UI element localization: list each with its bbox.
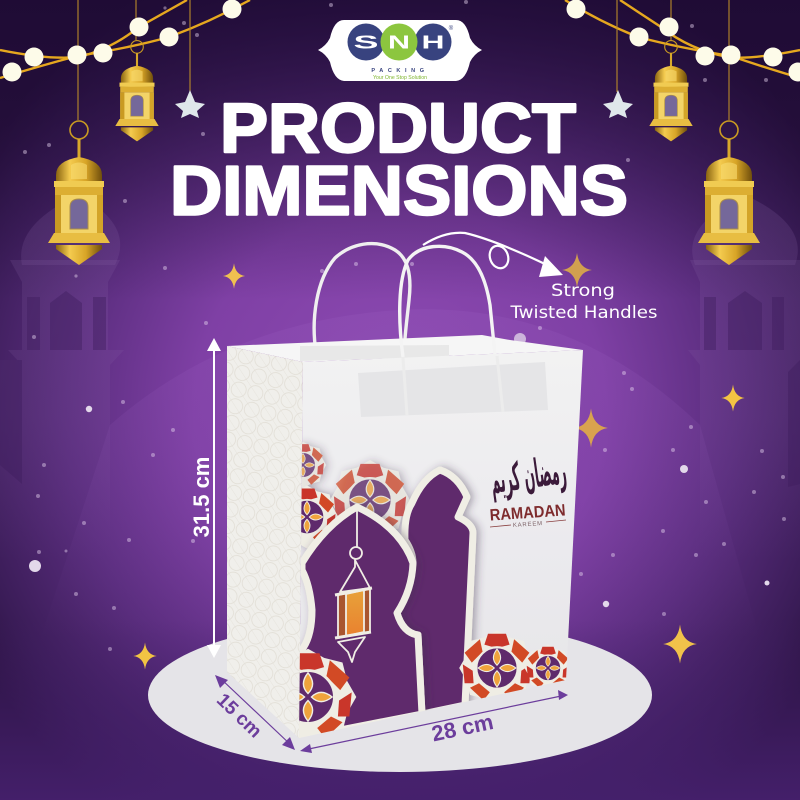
- logo: Your One Stop Solution: [373, 75, 427, 81]
- left mosque silhouette: [0, 195, 124, 560]
- kareem label: [490, 520, 566, 529]
- paper bag: [227, 244, 583, 745]
- dimension: width: 28 cm: [429, 709, 496, 746]
- logo: H: [422, 32, 444, 52]
- inner back shadow: [300, 345, 449, 361]
- front handle: [400, 246, 495, 357]
- back panel: [227, 335, 583, 362]
- title: DIMENSIONS: [170, 152, 628, 230]
- handwritten callout text: Twisted Handles: [509, 303, 658, 323]
- side panel: [227, 346, 303, 738]
- handwritten callout text: Strong: [551, 281, 615, 301]
- bottom rosettes: [299, 648, 356, 734]
- handwritten callout text: [509, 281, 658, 323]
- right garland: [565, 0, 800, 120]
- logo: ®: [449, 25, 454, 32]
- ramadan label: RAMADAN: [489, 501, 566, 525]
- logo: [318, 20, 482, 81]
- dimension: depth: [212, 675, 295, 750]
- left garland: [0, 0, 250, 120]
- lantern: small right: [649, 41, 693, 141]
- handle straps through patch: [403, 356, 503, 415]
- base ellipse platform: [148, 618, 652, 772]
- kareem label: KAREEM: [513, 521, 543, 529]
- light dome behind bag: [40, 309, 760, 640]
- paper bag: رمضان كريم: [487, 448, 569, 503]
- arch: [299, 507, 422, 738]
- front panel: [299, 350, 583, 738]
- logo: N: [388, 32, 410, 52]
- lantern: large right: [698, 121, 760, 265]
- hanging lamp: [335, 510, 372, 662]
- logo: S: [354, 32, 378, 52]
- dimension: width: [300, 690, 568, 753]
- sparkles: [133, 253, 745, 670]
- left mosque windows: [0, 291, 106, 484]
- dimension: height: [189, 338, 221, 658]
- right mosque silhouette: [688, 195, 800, 560]
- lantern: large left: [48, 121, 110, 265]
- curved arrow to handles: [423, 233, 563, 277]
- title: PRODUCT: [220, 89, 576, 167]
- title: [170, 89, 628, 230]
- lantern: small left: [115, 41, 159, 141]
- star: left silver: [175, 90, 205, 118]
- dimension: height: 31.5 cm: [189, 457, 214, 537]
- handle patch: [358, 362, 548, 417]
- right mosque windows: [704, 291, 800, 487]
- minaret: [397, 470, 473, 714]
- front decoration: [299, 439, 568, 738]
- dimension: depth: 15 cm: [212, 690, 265, 742]
- rosettes: [301, 439, 413, 551]
- star: right silver: [603, 90, 633, 118]
- large dots: [29, 333, 770, 607]
- back handle: [314, 244, 410, 357]
- logo: PACKING: [371, 68, 429, 74]
